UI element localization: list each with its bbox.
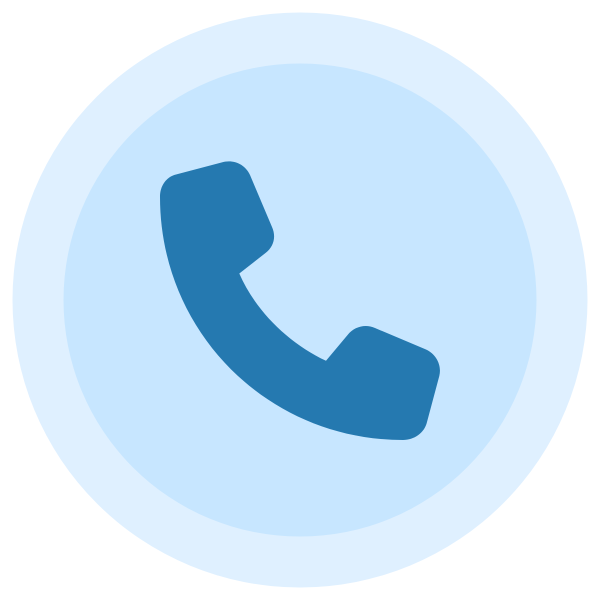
inner circle [64,64,536,536]
icon: phone handset [160,161,440,440]
